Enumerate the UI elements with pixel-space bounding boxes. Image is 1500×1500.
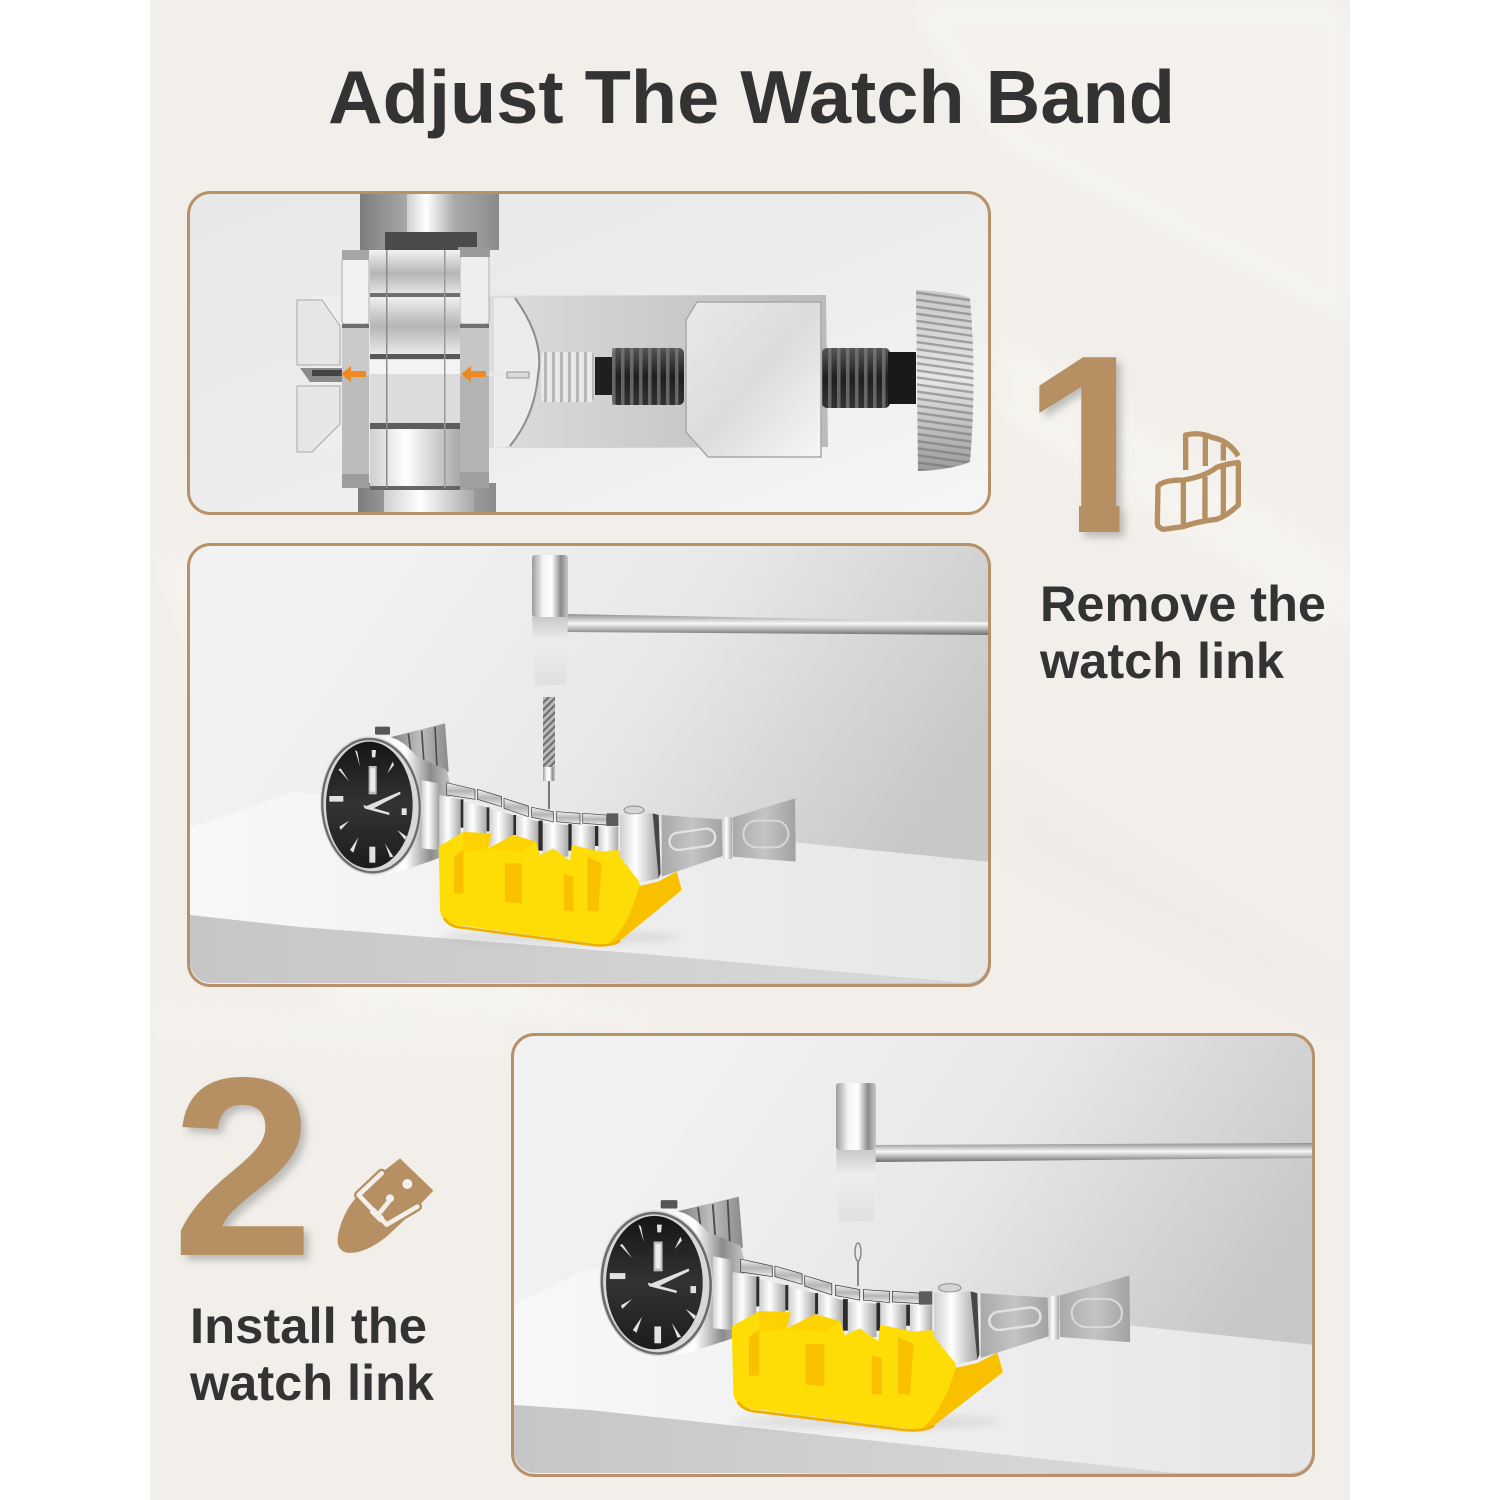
upper band links <box>447 783 607 825</box>
tool left jaw pads <box>297 300 345 452</box>
tool body <box>460 295 828 448</box>
watch on yellow link holder <box>317 723 796 945</box>
punch tool <box>543 697 555 809</box>
step 2 label <box>189 1298 434 1411</box>
watch on yellow link holder <box>596 1197 1130 1430</box>
table <box>514 1302 1312 1473</box>
table <box>190 821 988 983</box>
icon: watch links <box>1157 434 1238 529</box>
watch band top strap <box>360 194 499 254</box>
step 1 label: Remove the <box>1040 576 1326 632</box>
sliding block <box>686 302 821 457</box>
yellow link holder <box>439 832 682 944</box>
small knurled collar <box>541 352 594 402</box>
panel: hammer with pin and watch band <box>512 1034 1314 1480</box>
title: Adjust The Watch Band <box>328 55 1175 139</box>
panel: hammer tapping punch into watch band <box>188 544 990 990</box>
spring bar pin <box>855 1243 861 1286</box>
needle pin <box>489 372 529 378</box>
lower band links <box>422 780 618 857</box>
step 1 label: watch link <box>1039 633 1284 689</box>
page background <box>150 0 1350 1500</box>
left threaded screw <box>595 348 684 405</box>
panel: pin remover tool photo <box>188 192 990 514</box>
icon: watch strap buckle <box>338 1158 433 1253</box>
watch band bottom strap <box>358 483 496 513</box>
step 2 label: Install the <box>190 1298 427 1354</box>
step 1 number: 1 <box>1022 302 1163 586</box>
hammer <box>836 1083 1312 1222</box>
hammer <box>532 555 988 686</box>
orange arrows on pin holes <box>341 366 486 382</box>
watch band links <box>342 247 490 490</box>
dial <box>326 742 413 868</box>
fold-over plate <box>662 815 723 877</box>
step 2 number: 2 <box>172 1025 314 1310</box>
case <box>350 736 451 875</box>
step 2 label: watch link <box>189 1355 434 1411</box>
crown <box>375 727 390 735</box>
clasp <box>624 806 644 814</box>
step 1 label <box>1039 576 1326 689</box>
knurled knob <box>916 290 974 471</box>
back band <box>390 723 449 778</box>
right threaded screw <box>822 348 916 408</box>
